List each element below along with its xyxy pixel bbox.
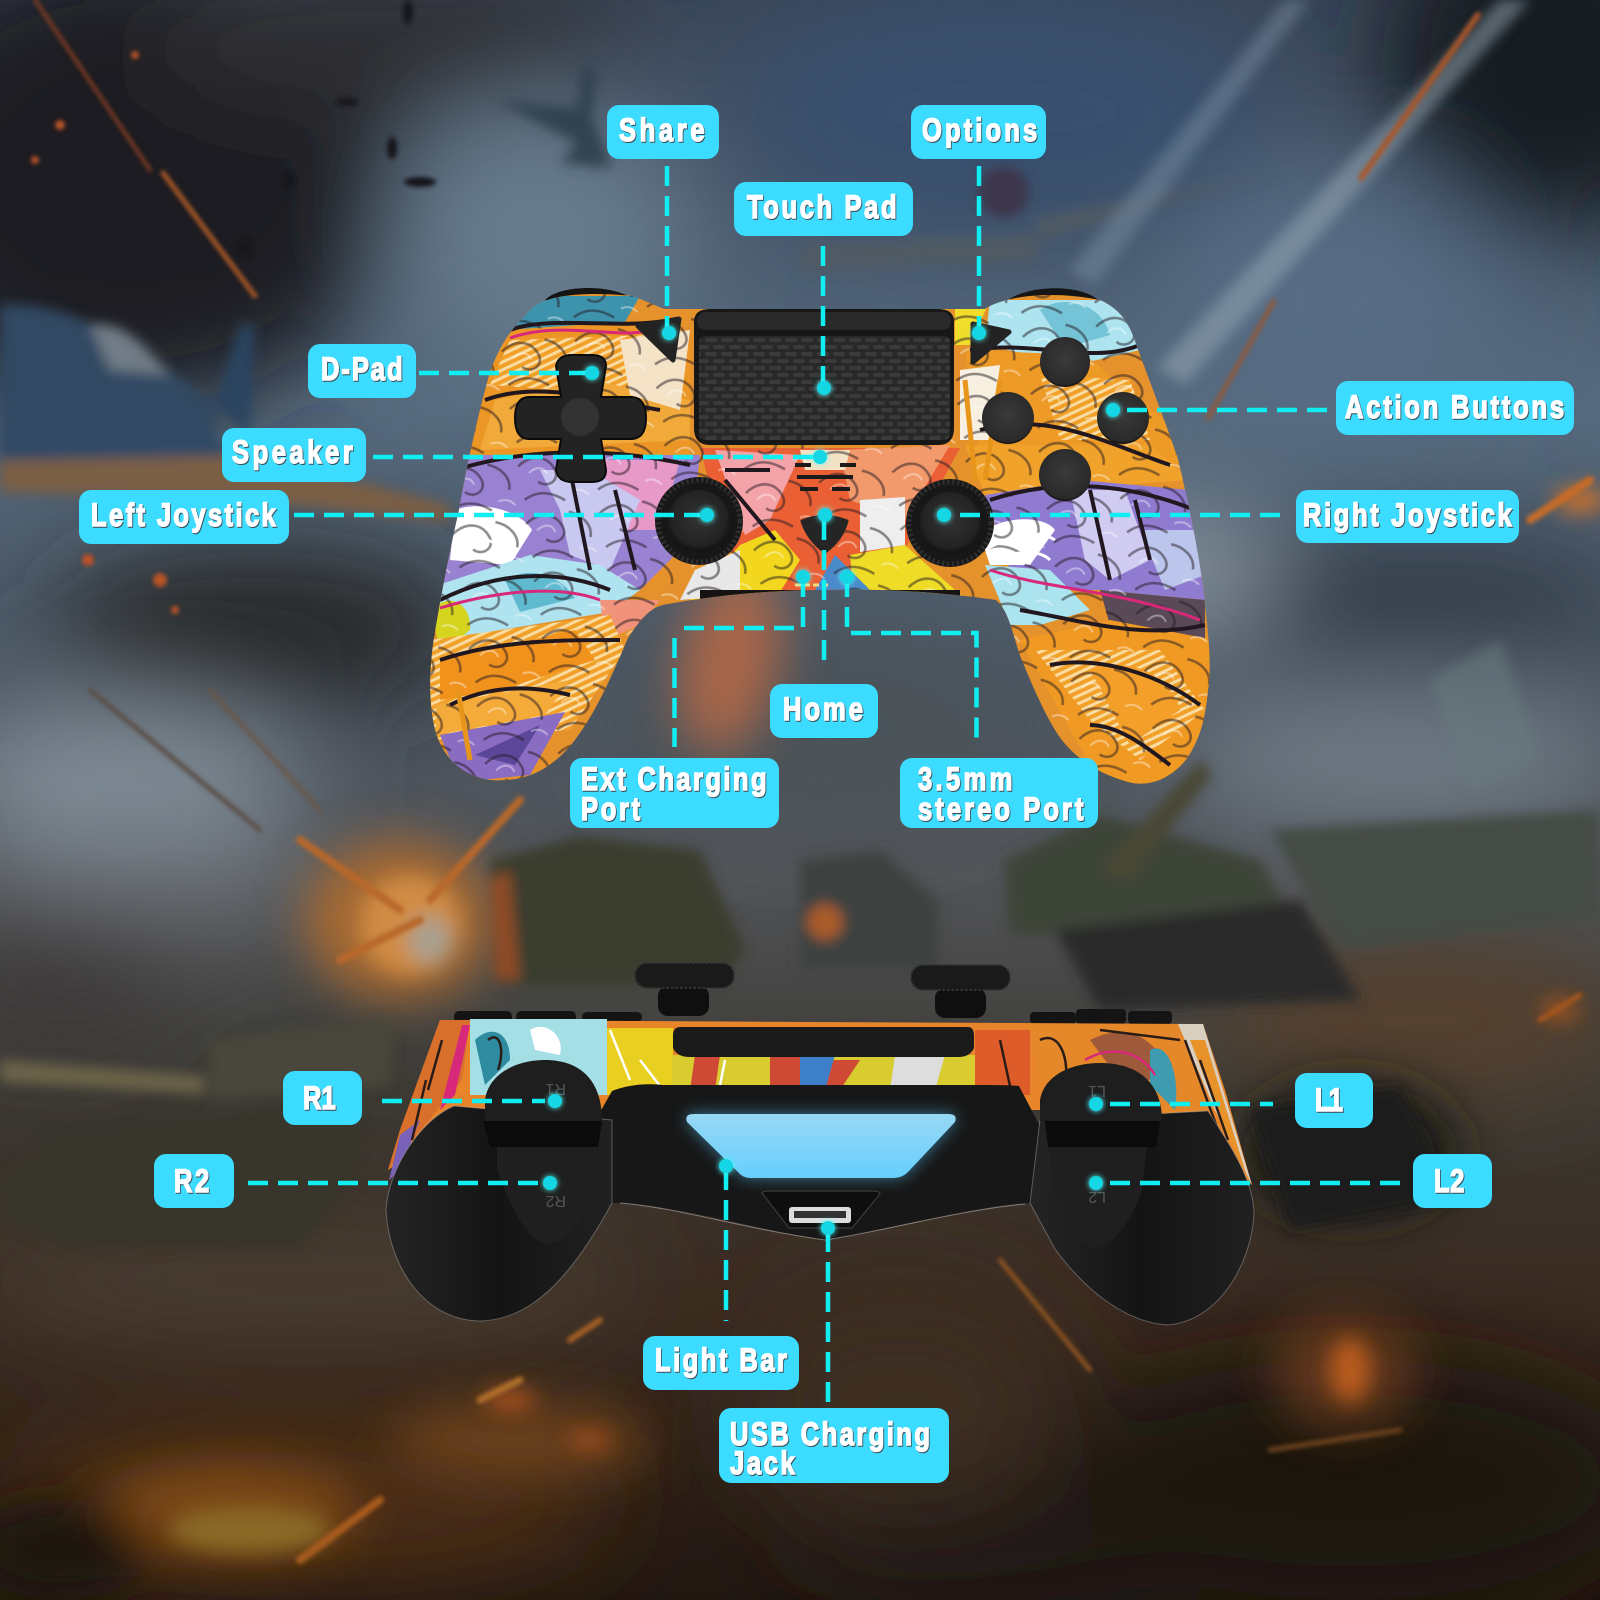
label: Share: Share <box>619 113 705 149</box>
trigger marks: L1 <box>1088 1082 1106 1099</box>
touch pad <box>694 309 954 445</box>
label: R2 <box>154 1154 234 1208</box>
label: USB Charging Jack: USB Charging <box>730 1417 930 1453</box>
graffiti body <box>420 280 1220 800</box>
label: Options <box>911 105 1046 159</box>
light bar <box>686 1114 956 1178</box>
graffiti band <box>388 1019 1252 1185</box>
label: R2: R2 <box>174 1164 209 1200</box>
label: L1 <box>1295 1073 1373 1128</box>
back panel and grips <box>386 1084 1254 1325</box>
trigger buttons <box>483 1060 1162 1248</box>
label: Action Buttons: Action Buttons <box>1345 390 1564 426</box>
action buttons <box>982 337 1149 501</box>
label: Ext Charging Port <box>570 758 779 828</box>
top buttons <box>454 1009 1172 1024</box>
label: 3.5mm stereo Port: 3.5mm <box>918 762 1012 798</box>
trigger marks: R1 <box>545 1080 566 1097</box>
label: Home: Home <box>783 692 863 728</box>
trigger marks: R2 <box>545 1192 566 1209</box>
label: D-Pad: D-Pad <box>321 352 403 388</box>
label: Home <box>770 684 878 738</box>
usb port <box>762 1191 880 1228</box>
label: Left Joystick: Left Joystick <box>91 498 277 534</box>
label: Share <box>607 105 719 159</box>
home button <box>802 516 847 552</box>
label: R1 <box>283 1071 362 1125</box>
label: L1: L1 <box>1315 1083 1343 1119</box>
right joystick <box>906 479 994 567</box>
label: L2 <box>1413 1154 1492 1208</box>
label: Speaker: Speaker <box>232 435 353 471</box>
front view controller <box>420 280 1220 800</box>
label: Right Joystick: Right Joystick <box>1303 498 1513 534</box>
label: Ext Charging Port: Ext Charging <box>581 762 767 798</box>
joystick stems <box>635 963 1010 1018</box>
left joystick <box>655 477 743 565</box>
shoulder buttons <box>545 288 1100 302</box>
label: Ext Charging Port: Port <box>581 792 641 828</box>
label: R1: R1 <box>303 1081 336 1117</box>
label: Left Joystick <box>79 490 289 544</box>
label: Right Joystick <box>1296 490 1519 543</box>
options button <box>973 324 1009 362</box>
label: USB Charging Jack: Jack <box>730 1446 796 1482</box>
label: Options: Options <box>922 113 1037 149</box>
label: Touch Pad: Touch Pad <box>747 190 897 226</box>
trigger marks: L2 <box>1088 1188 1106 1205</box>
speaker holes <box>795 463 856 491</box>
callout connector lines <box>248 166 1402 1403</box>
label: Light Bar <box>643 1336 799 1390</box>
label: USB Charging Jack <box>719 1408 949 1483</box>
touch pad edge <box>673 1027 974 1057</box>
trigger marks <box>545 1080 1106 1209</box>
label: 3.5mm stereo Port: stereo Port <box>918 792 1084 828</box>
ports <box>795 584 831 586</box>
label: L2: L2 <box>1434 1164 1464 1200</box>
back view controller <box>386 963 1254 1325</box>
share button <box>638 319 679 360</box>
label: D-Pad <box>308 344 416 398</box>
label: Speaker <box>222 428 366 482</box>
label: 3.5mm stereo Port <box>900 758 1098 828</box>
label: Action Buttons <box>1336 381 1574 435</box>
label: Light Bar: Light Bar <box>655 1343 787 1379</box>
label: Touch Pad <box>734 182 913 236</box>
d-pad <box>515 355 646 482</box>
